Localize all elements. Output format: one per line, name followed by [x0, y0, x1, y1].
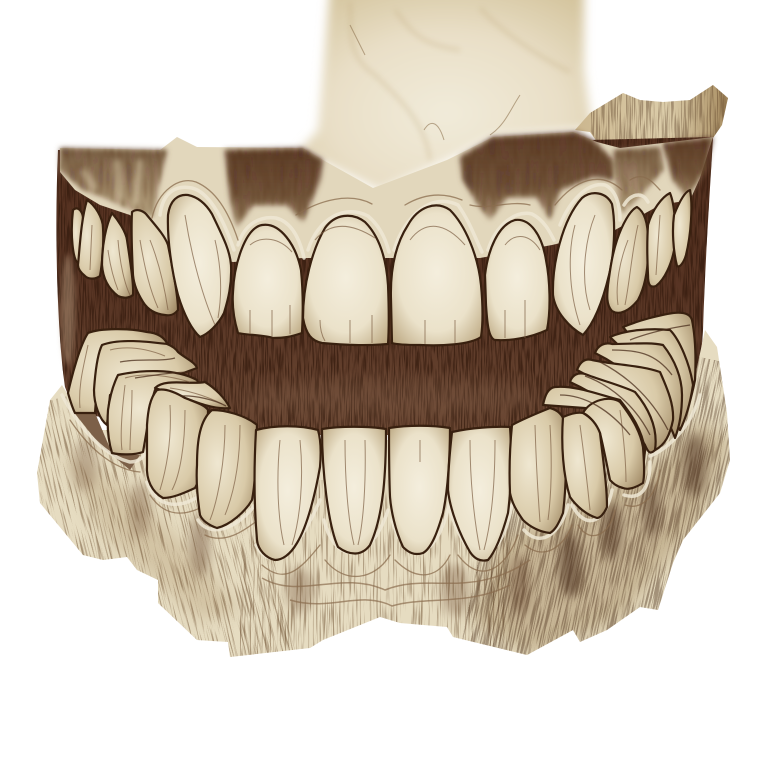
lower lateral incisor left: [255, 426, 321, 560]
lower molar left 3: [108, 371, 199, 454]
upper central incisor left: [303, 216, 389, 345]
lower molar left cusp: [155, 382, 230, 408]
lower molar right 5: [570, 373, 656, 452]
hatch fan left: [37, 396, 295, 657]
lower molar right 4: [577, 359, 673, 450]
pale patch on left wall: [61, 255, 75, 365]
panel: lower gum: [37, 330, 730, 657]
dark gum far left: [60, 148, 167, 217]
lower molar left 2: [94, 341, 197, 425]
tooth detail strokes: [80, 345, 626, 550]
scalloped gum arcs under teeth: [62, 395, 700, 558]
gum shading: [37, 320, 730, 657]
lower molar left 1: [68, 329, 168, 413]
mid gum right: [613, 147, 663, 213]
upper premolar left 2: [102, 213, 133, 298]
lower canine right: [510, 408, 566, 533]
upper molar far left: [72, 208, 83, 263]
upper premolar left 3: [78, 200, 103, 279]
panel: upper gum: [50, 130, 720, 270]
lower central incisor right: [389, 426, 450, 554]
hatch centre: [240, 480, 510, 670]
illustration: engraved teeth on parchment: [37, 0, 730, 657]
lower molar right 6: [543, 387, 645, 470]
tone left side: [60, 450, 240, 620]
upper canine left: [168, 195, 231, 337]
lower molar right 2: [610, 329, 693, 430]
shadow behind rear left molars: [72, 410, 140, 470]
dark gum right of centre: [460, 132, 613, 220]
tone right side: [470, 420, 730, 655]
lower premolar right large: [583, 399, 644, 489]
lower premolar right: [562, 413, 607, 518]
lower lateral incisor right: [448, 427, 511, 561]
upper central incisor right: [391, 205, 482, 345]
lower centre gum ridge: [262, 560, 530, 606]
upper premolar left 1: [132, 210, 178, 315]
dark gum left of centre: [225, 148, 323, 227]
lower canine left: [197, 410, 257, 528]
upper lateral incisor left: [233, 225, 303, 338]
panel: lower teeth: [68, 313, 696, 561]
upper lateral incisor right: [485, 220, 550, 340]
mouth cavity: [50, 130, 720, 440]
light arcs above teeth: [160, 185, 648, 258]
upper molar right: [673, 190, 691, 266]
upper premolar right 1: [607, 207, 648, 313]
lower premolar left: [147, 389, 208, 498]
lower molar right 1: [623, 313, 696, 420]
hatch fan right: [462, 357, 730, 655]
lower central incisor left: [322, 427, 386, 554]
panel: upper teeth: [72, 190, 691, 345]
dark clefts between roots: [559, 533, 581, 597]
pale patch mid-band: [240, 378, 540, 418]
lower molar right 3: [595, 343, 682, 438]
upper canine right: [553, 193, 614, 335]
upper premolar right 2: [647, 193, 675, 287]
right torn parchment flap: [575, 85, 728, 140]
gum hatching: [59, 130, 714, 225]
dark gum far right: [663, 137, 713, 197]
dark occlusal creases: [120, 325, 690, 435]
parchment: upper neck patch: [300, 0, 592, 190]
tooth detail strokes: [90, 215, 660, 344]
pale streaks far left: [83, 160, 140, 205]
